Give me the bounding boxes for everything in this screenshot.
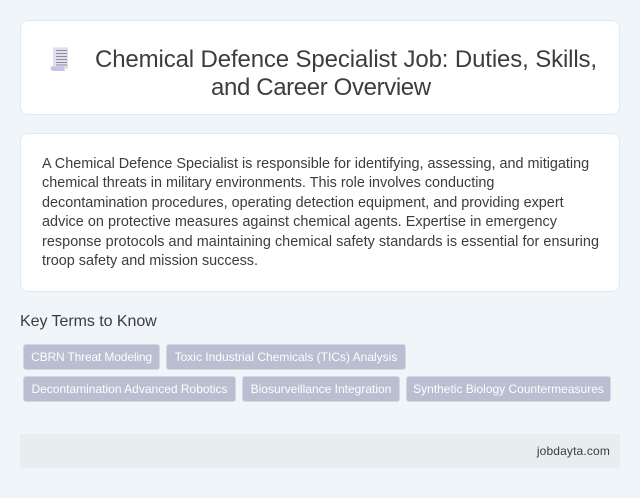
description panel: [20, 133, 620, 292]
description text: response protocols and maintaining chemical safety standards is essential for ensuring: [42, 234, 599, 250]
tags: [23, 344, 611, 402]
key terms heading: Key Terms to Know: [20, 313, 157, 330]
tag: decontamination: [23, 376, 236, 402]
description text: decontamination procedures, operating detection equipment, and providing expert: [42, 195, 564, 211]
tag: synthetic biology: [406, 376, 611, 402]
description text: troop safety and mission success.: [42, 253, 258, 269]
footer source: jobdayta.com: [537, 444, 610, 458]
description text: chemical threats in military environments. This role involves conducting: [42, 175, 494, 191]
tag: TICs: [166, 344, 406, 370]
tag: synthetic biology: Synthetic Biology Countermeasures: [413, 382, 604, 396]
description text: A Chemical Defence Specialist is responsible for identifying, assessing, and mitigating: [42, 156, 589, 172]
header panel: [20, 20, 620, 115]
tag: TICs: Toxic Industrial Chemicals (TICs) Analysis: [175, 350, 397, 364]
tag: CBRN: CBRN Threat Modeling: [31, 350, 152, 364]
tag: biosurveillance: Biosurveillance Integration: [251, 382, 391, 396]
title: and Career Overview: [211, 74, 431, 101]
description text: advice on protective measures against chemical agents. Expertise in emergency: [42, 214, 557, 230]
footer bar: [20, 434, 620, 468]
title: Chemical Defence Specialist Job: Duties, Skills,: [95, 46, 597, 73]
title: [95, 46, 597, 101]
tag: biosurveillance: [242, 376, 400, 402]
tag: CBRN: [23, 344, 160, 370]
description text: [42, 156, 599, 269]
tag: decontamination: Decontamination Advanced Robotics: [31, 382, 228, 396]
icon: document scroll: [50, 47, 68, 71]
